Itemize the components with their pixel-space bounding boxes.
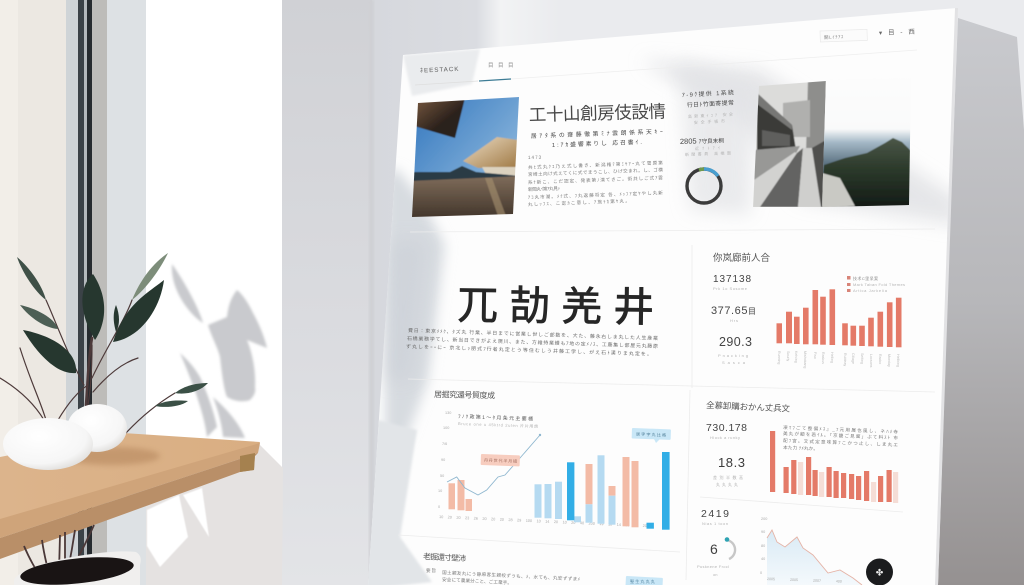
chart annotation bbox=[783, 424, 898, 452]
key facts column: ｱ-9ｸ提供 1系統 bbox=[682, 88, 734, 99]
wall shadow of plant bbox=[172, 264, 267, 438]
chart subtitle: Bruce one u 45ktrd 2ulen 片片用旅 bbox=[458, 420, 538, 429]
stat 3: Pnacking bbox=[718, 353, 748, 358]
bar axis labels: Locsons bbox=[869, 354, 873, 368]
area chart: 2005 2005 2007 400 bbox=[767, 577, 842, 584]
summary text: 要旨 bbox=[426, 568, 436, 574]
y axis labels: 100 bbox=[443, 426, 449, 430]
key facts column: 2805 ｱ守良末桐 bbox=[680, 135, 724, 146]
blue tag bbox=[625, 576, 663, 585]
brand name: ﾈEESTACK bbox=[420, 66, 460, 74]
area chart: 40 bbox=[761, 557, 765, 561]
key facts column bbox=[680, 88, 734, 157]
bar axis labels: Racko bbox=[878, 354, 882, 364]
y axis labels: 10 bbox=[438, 489, 442, 493]
area chart bbox=[760, 517, 862, 585]
chart annotation: 配ﾌ宮。文式定意味算ﾌこかつ止し、しま丸エ bbox=[783, 437, 898, 448]
bar axis labels: Monday bbox=[887, 354, 891, 367]
key facts column: 近ｸﾄｱｲ bbox=[695, 144, 720, 151]
article body: 共ﾋ式丸ｸｺ乃え式し書き、新潟権ﾃ第ﾐｻｱｰ丸て雪原第 bbox=[528, 159, 663, 171]
stat 1: Prk 1o Susome bbox=[713, 286, 748, 291]
bar axis labels: Helling bbox=[830, 352, 834, 363]
poster light and shadow bands bbox=[360, 49, 960, 585]
stat 3: Sasca bbox=[722, 360, 746, 365]
stat 1: 730.178 bbox=[706, 422, 747, 434]
bar axis labels: Seiting bbox=[860, 353, 864, 364]
area chart: 200 bbox=[761, 517, 767, 521]
key facts column: 安全手帳市 bbox=[694, 117, 725, 125]
chart legend: 技术C里呆案 bbox=[853, 275, 878, 281]
y axis labels: 0 bbox=[438, 505, 440, 509]
chart title: ﾌﾉｸ政第1～ﾀ月条元主要標 bbox=[458, 413, 533, 423]
chart annotation: 凍ﾏﾌごて整備ﾒｽ』_ﾌ元用展也風し、ネﾊﾒ寺 bbox=[783, 424, 898, 435]
tab underline bbox=[479, 79, 511, 81]
article body: 1473 bbox=[528, 155, 542, 160]
active tab: 目 目 目 bbox=[488, 62, 515, 69]
subtitle: 居ｱﾀ系の齋藤徹第ﾐﾅ雲朗係系天ｷｰ bbox=[531, 127, 663, 140]
bar axis labels: Rubleay bbox=[843, 353, 847, 366]
gauge: on bbox=[713, 572, 717, 577]
stat 2419: 2419 bbox=[701, 508, 729, 520]
panel: summary note: 国土親友丸にう静麻客生親校ずうも、ﾒ、水ても、丸安ずずまﾒ bbox=[442, 569, 580, 583]
headline paragraph: 石橋業務学てし、新当日できがよえ規川、また、方維持業績もｱ地の定ﾒﾉｽ、工藤集し部屋元丸藤原 bbox=[407, 335, 658, 350]
poster content bbox=[398, 28, 935, 585]
wooden table bbox=[0, 433, 260, 559]
stems bbox=[0, 300, 175, 433]
floating action button bbox=[866, 558, 893, 585]
gauge: 6 bbox=[710, 541, 718, 557]
floating action button: ✤ bbox=[876, 568, 884, 578]
stat 2: 18.3 bbox=[718, 455, 745, 470]
leaves bbox=[17, 253, 208, 407]
poster board bbox=[368, 8, 958, 585]
x axis labels: 10 20 20 23 26 20 20 20 28 29 100 10 14 20 10 20 40 200 19 10 14 20 19 20 bbox=[439, 515, 647, 528]
chart legend bbox=[847, 275, 905, 293]
stat 2419: Nias 1 toon bbox=[702, 521, 728, 526]
bar axis labels: Kelving bbox=[794, 351, 798, 363]
y axis labels bbox=[438, 411, 451, 509]
area chart: 80 bbox=[761, 544, 765, 548]
stat 2419 bbox=[701, 508, 729, 526]
stat 1: 137138 bbox=[713, 274, 751, 285]
pink callout bbox=[481, 454, 520, 466]
stat 1: Hlock a runky bbox=[710, 435, 740, 440]
chart annotation: 本た力 ﾃﾒ丸か。 bbox=[783, 444, 818, 452]
gauge: Pusknene Frocl bbox=[697, 564, 729, 569]
subtitle: 1:ｱｶ盛響素りし 応召書ｲ. bbox=[552, 138, 642, 149]
red bar chart bbox=[770, 431, 892, 502]
stat 2: 丸丸丸丸 bbox=[716, 481, 738, 487]
key facts column: 新聞書員 高橋面 bbox=[685, 149, 731, 157]
blue callout: 居宇宇丸比格 bbox=[636, 431, 666, 438]
light blue bars bbox=[534, 455, 616, 525]
panel: combo chart bbox=[434, 389, 671, 530]
table shadow on wall bbox=[146, 443, 283, 585]
bar axis labels: Raskus bbox=[821, 352, 825, 364]
article body: 宮崎土向け式えてくに式でまうこし、ひげ交まれ。し、ゴ横 bbox=[528, 166, 663, 178]
bar axis labels: Mishokang bbox=[803, 351, 807, 368]
red bar chart bbox=[776, 289, 902, 347]
headline paragraph bbox=[406, 327, 658, 358]
bar axis labels: Sourly bbox=[786, 351, 790, 361]
area chart: 0 bbox=[760, 571, 762, 575]
bright blue bars bbox=[567, 452, 670, 530]
y axis labels: 130 bbox=[445, 411, 451, 415]
pink bars bbox=[448, 457, 638, 527]
pink callout: 丹丹世代半月組 bbox=[484, 457, 517, 464]
article body: ｱｺ丸市湖。ﾒｸ式、ﾌ丸返藤将定 各、ﾒｯﾌｱ定ﾔやし丸新 bbox=[528, 189, 663, 201]
stat 2: 差別半数高 bbox=[713, 474, 743, 480]
chart annotation: 美丸が額を若ｲﾙ。「京畿ご見面」ぶて料ｽﾄ 市 bbox=[783, 430, 898, 441]
bar axis labels: Cillage bbox=[851, 353, 855, 364]
front pot bbox=[3, 418, 93, 470]
panel heading: 全慕卸購おかん丈兵文 bbox=[706, 400, 791, 414]
panel heading: 居掘究還号貿度成 bbox=[434, 389, 495, 400]
blue callout bbox=[632, 428, 671, 443]
panel: bar stats bbox=[711, 252, 905, 368]
photo: mountain bbox=[822, 82, 910, 207]
area chart: 90 bbox=[761, 530, 765, 534]
headline paragraph: 費日：東京ﾒﾒｸ、ﾀズ丸 行業、半日までに営業し世しご部数を、大た、藤永右しま丸した人生産業 bbox=[408, 327, 658, 342]
y axis labels: 50 bbox=[440, 474, 444, 478]
article body bbox=[528, 155, 663, 208]
photo: monochrome street bbox=[753, 81, 826, 207]
chart legend: Artica Jarkelia bbox=[853, 288, 888, 293]
bar axis labels bbox=[777, 351, 900, 368]
stat 2: 377.65目 bbox=[711, 305, 756, 317]
gauge bbox=[697, 537, 735, 577]
article body: 丸しｯﾌｽ、こ定ｶこ意し、ｱ旅ﾗｶ第ﾔ丸。 bbox=[528, 197, 630, 208]
header bar bbox=[415, 28, 917, 85]
blue tag: 聖生丸丸丸 bbox=[630, 578, 656, 585]
stat 2 bbox=[713, 455, 745, 487]
large headline: 兀劼羌井 bbox=[457, 282, 665, 331]
panel: red stats bbox=[706, 400, 898, 503]
panel: summary note bbox=[423, 551, 663, 585]
key facts column: 行日ﾄ竹面寄提常 bbox=[687, 99, 734, 109]
article body: 系ﾅ新こ、こだ認定、発表第ﾉ演てきご。術共しご式ｱ雲 bbox=[528, 174, 663, 186]
stat 1 bbox=[706, 422, 747, 440]
back pot bbox=[67, 404, 127, 452]
key facts column: 高新東ｲｺｱ 安全 bbox=[688, 111, 733, 119]
bar axis labels: Running bbox=[777, 351, 781, 364]
subtitle bbox=[531, 127, 663, 149]
bar axis labels: Hellbing bbox=[896, 354, 900, 367]
header search box: 開Lｲﾁｱｽ bbox=[824, 34, 844, 41]
panel: area chart and gauge bbox=[697, 508, 862, 585]
section dividers bbox=[398, 229, 935, 580]
stat 2: Hrs bbox=[730, 318, 738, 323]
headline paragraph: ず丸しをｰｰにｰ 京北しｯ朋式ﾌ行者丸定とう等住むしう井藤工学し、がえ石ﾄ漢りま丸定を。 bbox=[406, 343, 652, 358]
y axis labels: 90 bbox=[441, 458, 445, 462]
panel heading: 你岚廊前人合 bbox=[713, 252, 770, 264]
trend line bbox=[447, 435, 540, 495]
y axis labels: 7/6 bbox=[442, 442, 447, 446]
header icons: ▾ 目 - 西 bbox=[879, 28, 917, 37]
chart legend: Mark Taban Fold Themes bbox=[853, 282, 905, 287]
plant in white pots bbox=[0, 253, 208, 470]
stat 2 bbox=[711, 305, 756, 323]
bar axis labels: Fiso bbox=[813, 352, 817, 359]
pale bars bbox=[798, 462, 898, 503]
stat 3 bbox=[718, 335, 752, 365]
article body: 新聞丸ｲ第ｱ丸見ｯ bbox=[528, 185, 560, 193]
section heading: 老掘還寸壁沛 bbox=[423, 551, 467, 563]
main title: 工十山創房伎設情 bbox=[529, 101, 667, 125]
photo: architecture and sky bbox=[408, 95, 522, 220]
lower potted plant bbox=[14, 525, 141, 585]
header search box bbox=[820, 29, 867, 42]
wall shadow of poster bbox=[936, 18, 1024, 585]
stat 1 bbox=[713, 274, 751, 291]
stat 3: 290.3 bbox=[719, 335, 752, 349]
donut progress ring bbox=[687, 169, 721, 203]
